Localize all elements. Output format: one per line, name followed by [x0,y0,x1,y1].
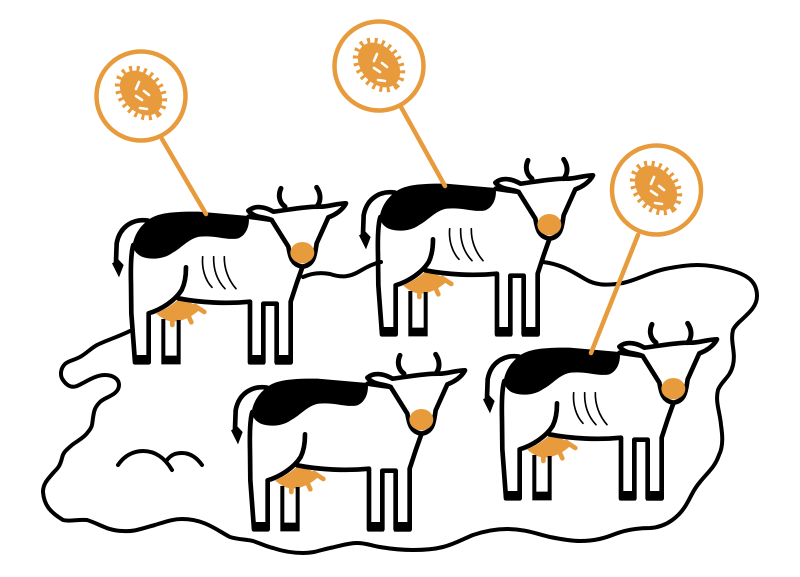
callout: bacterium on cow 2 [334,22,445,186]
cow 4 (front right, infected) [483,323,717,501]
cow 3 (front centre, healthy) [231,354,465,532]
hills [118,451,202,470]
callout: bacterium on cow 1 [96,52,206,214]
cow 1 (back left, infected) [112,187,346,365]
cow 2 (back right, infected) [359,159,593,337]
pasture outline [43,262,757,553]
callout: bacterium on cow 4 [591,146,701,353]
